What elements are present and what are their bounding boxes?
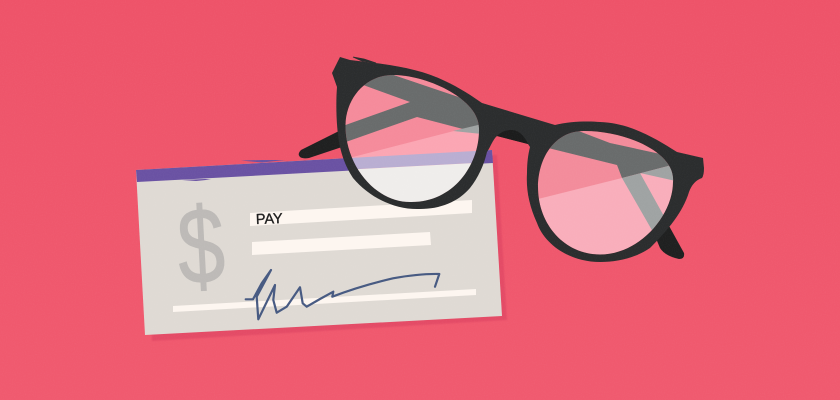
right lens [538, 131, 674, 254]
cheque [136, 150, 507, 341]
signature [246, 270, 439, 319]
glasses [299, 57, 704, 262]
left temple arm [299, 131, 342, 158]
cheque shadow [150, 155, 507, 341]
frame [332, 57, 704, 262]
dollar sign: $ [174, 184, 228, 308]
bridge shadow [497, 130, 528, 144]
signature line [173, 289, 476, 312]
right temple arm [655, 224, 684, 259]
frame smudge [353, 57, 376, 63]
cheque purple band [136, 150, 493, 182]
amount bar [252, 232, 431, 255]
left lens [346, 75, 479, 202]
cheque paper [136, 150, 502, 335]
payee bar [250, 200, 472, 226]
pay label: PAY [256, 211, 283, 228]
